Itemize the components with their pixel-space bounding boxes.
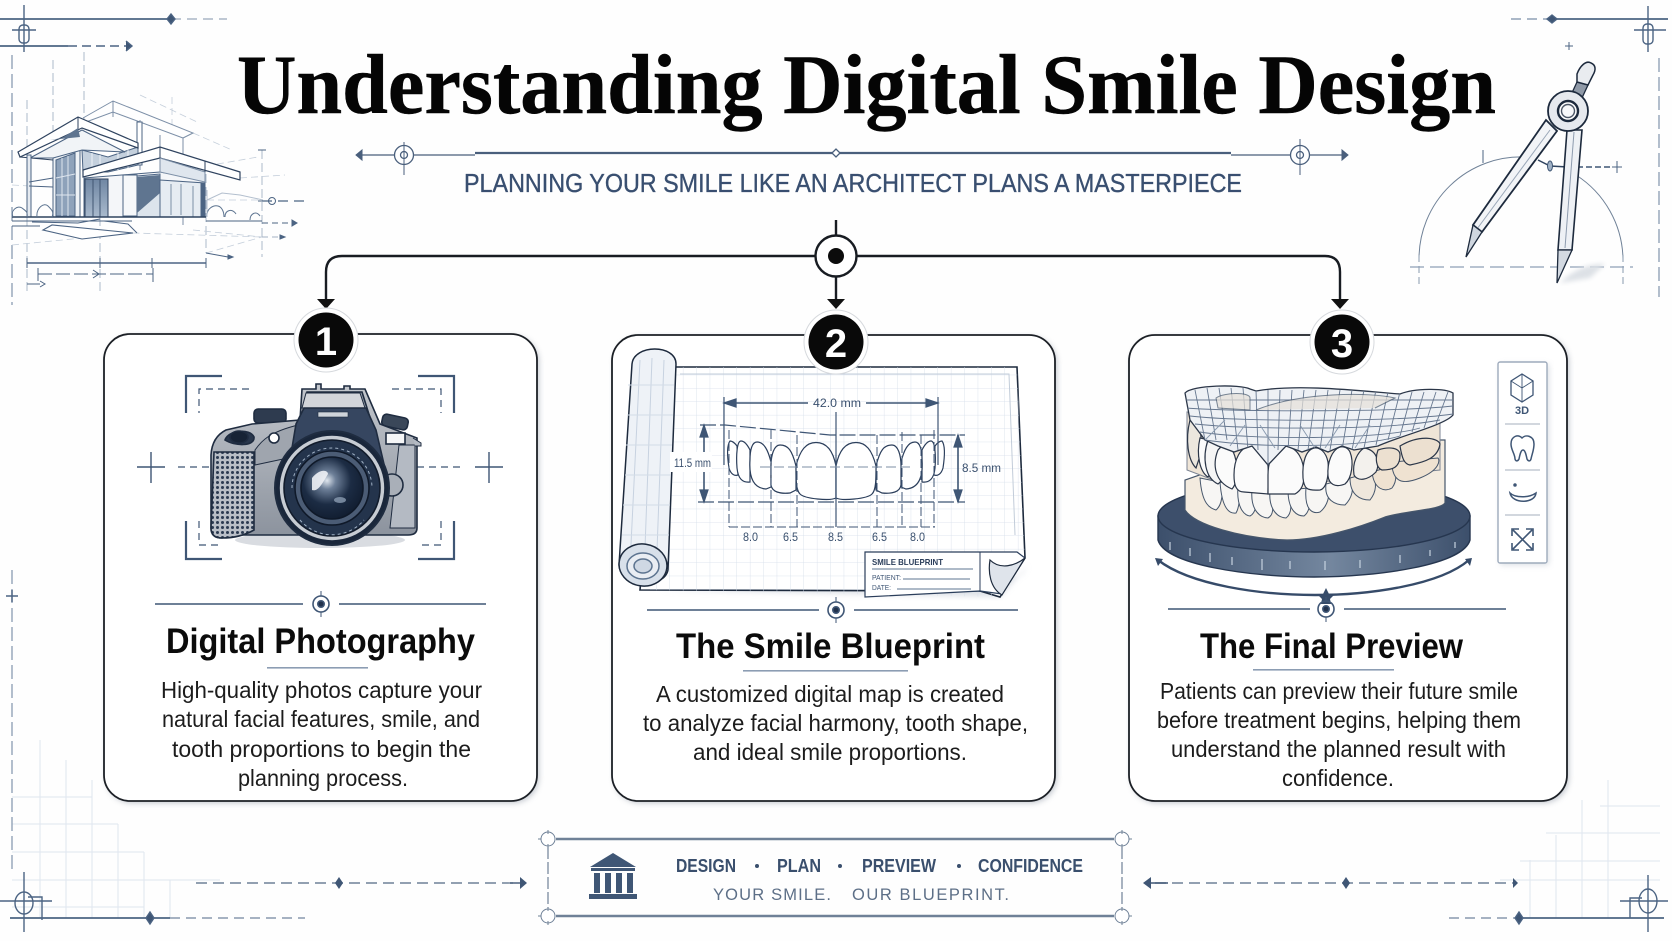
body text: natural facial features, smile, and [162,706,480,732]
construction arc [1419,157,1525,259]
divider [155,591,486,617]
body text: A customized digital map is created [656,681,1004,707]
badge 1: 1 [315,320,337,364]
panel: step 2 smile blueprint [612,310,1057,803]
dimension labels: 8.5 mm [962,461,1001,475]
blueprint sheet [640,367,1030,597]
body text: planning process. [238,765,408,791]
body text: understand the planned result with [1171,736,1506,762]
decoration: bottom-right blueprint grid [1500,780,1660,918]
title divider [356,139,1348,175]
upper back roof wire [83,101,193,225]
upper handle [1571,82,1588,100]
footer tagline words: PREVIEW [862,856,936,876]
title: Understanding Digital Smile Design [237,38,1496,132]
body text: Patients can preview their future smile [1160,678,1518,704]
blueprint dimensions [698,397,965,527]
body text: to analyze facial harmony, tooth shape, [643,710,1028,736]
subtitle: PLANNING YOUR SMILE LIKE AN ARCHITECT PLANS A MASTERPIECE [464,168,1242,198]
lower teeth [1200,458,1439,518]
dimension labels: 8.0 [743,530,758,544]
dimension lines [27,262,206,264]
3D model on turntable [1155,386,1472,604]
footer slogan: OUR BLUEPRINT. [852,886,1009,904]
dimension labels: 42.0 mm [813,396,861,410]
arrow: footer left dashed line [196,877,527,889]
shrubs [12,205,260,220]
icon: tooth [1511,436,1534,461]
lower storey [84,172,205,217]
paper roll [616,349,676,589]
body text [1157,678,1521,791]
footer tagline words: PLAN [777,856,821,876]
heading underline [1253,669,1394,671]
tower walls and glass [53,148,80,217]
heading: The Smile Blueprint [676,627,985,666]
footer slogan [713,886,1009,904]
upper wireframe mesh [1185,386,1453,470]
dimension labels: 6.5 [783,530,798,544]
porch columns [27,155,53,217]
badge 3 [1310,310,1374,374]
right leg [1558,130,1582,250]
lower roof slab [83,147,240,180]
title block: PATIENT: [872,575,901,582]
upper teeth [1188,420,1440,494]
dimension labels: 8.5 [828,530,843,544]
decoration: top-right corner marks [1511,6,1668,297]
pivot [1548,91,1588,131]
arrow: footer right dashed line [1143,877,1518,889]
icon: expand arrows [1512,529,1533,550]
decoration: bottom-left corner marks [0,570,305,932]
heading underline [267,667,368,669]
rotation arc [1158,560,1469,595]
decoration: bottom-right corner marks [1449,875,1668,932]
upper roof slab [18,117,138,157]
background hills [207,190,263,217]
title block: DATE: [872,585,891,592]
divider [1168,597,1506,622]
badge 2: 2 [825,322,847,366]
dimension labels: 11.5 mm [674,456,711,470]
panel: step 3 final preview [1129,310,1569,803]
heading: Digital Photography [166,622,475,661]
heading underline [743,670,908,672]
body text: confidence. [1282,765,1394,791]
body text: High-quality photos capture your [161,677,482,703]
icon: classical building [589,853,637,899]
tooth blueprint [728,441,944,499]
footer tagline words: CONFIDENCE [978,856,1083,876]
title block: SMILE BLUEPRINT [872,557,944,567]
illustration: architectural house sketch [12,52,310,292]
viewfinder brackets [137,376,503,559]
body text [161,677,482,791]
badge 3: 3 [1331,322,1353,366]
dimension labels: 6.5 [872,530,887,544]
body text: tooth proportions to begin the [172,736,471,762]
footer tagline words: DESIGN [676,856,736,876]
illustration: drafting compass [1410,62,1633,285]
icon: cube [1511,374,1533,402]
ground and steps [12,216,206,218]
icon: smile [1510,484,1536,501]
decoration: top-left corner marks [0,5,227,305]
divider [647,597,1018,623]
left leg [1473,120,1557,232]
connector: branch lines to the three steps [317,220,1349,309]
title block [865,552,1025,597]
label: 3D: 3D [1515,405,1529,417]
toolbar [1498,362,1549,565]
icon: camera [211,384,421,548]
body text: before treatment begins, helping them [1157,707,1521,733]
body text [643,681,1028,765]
badge 1 [294,308,358,372]
lower jaw cast [1185,440,1445,540]
footer tagline words [676,856,1083,876]
body text: and ideal smile proportions. [693,739,967,765]
dimension labels: 8.0 [910,530,925,544]
decoration: bottom-left blueprint grid [12,740,220,918]
dimension labels [670,396,1001,544]
panel: step 1 digital photography [104,308,539,803]
footer banner frame [538,830,1132,925]
construction lines [27,52,262,292]
badge 2 [804,310,868,374]
footer slogan: YOUR SMILE. [713,886,831,904]
heading: The Final Preview [1200,627,1464,666]
